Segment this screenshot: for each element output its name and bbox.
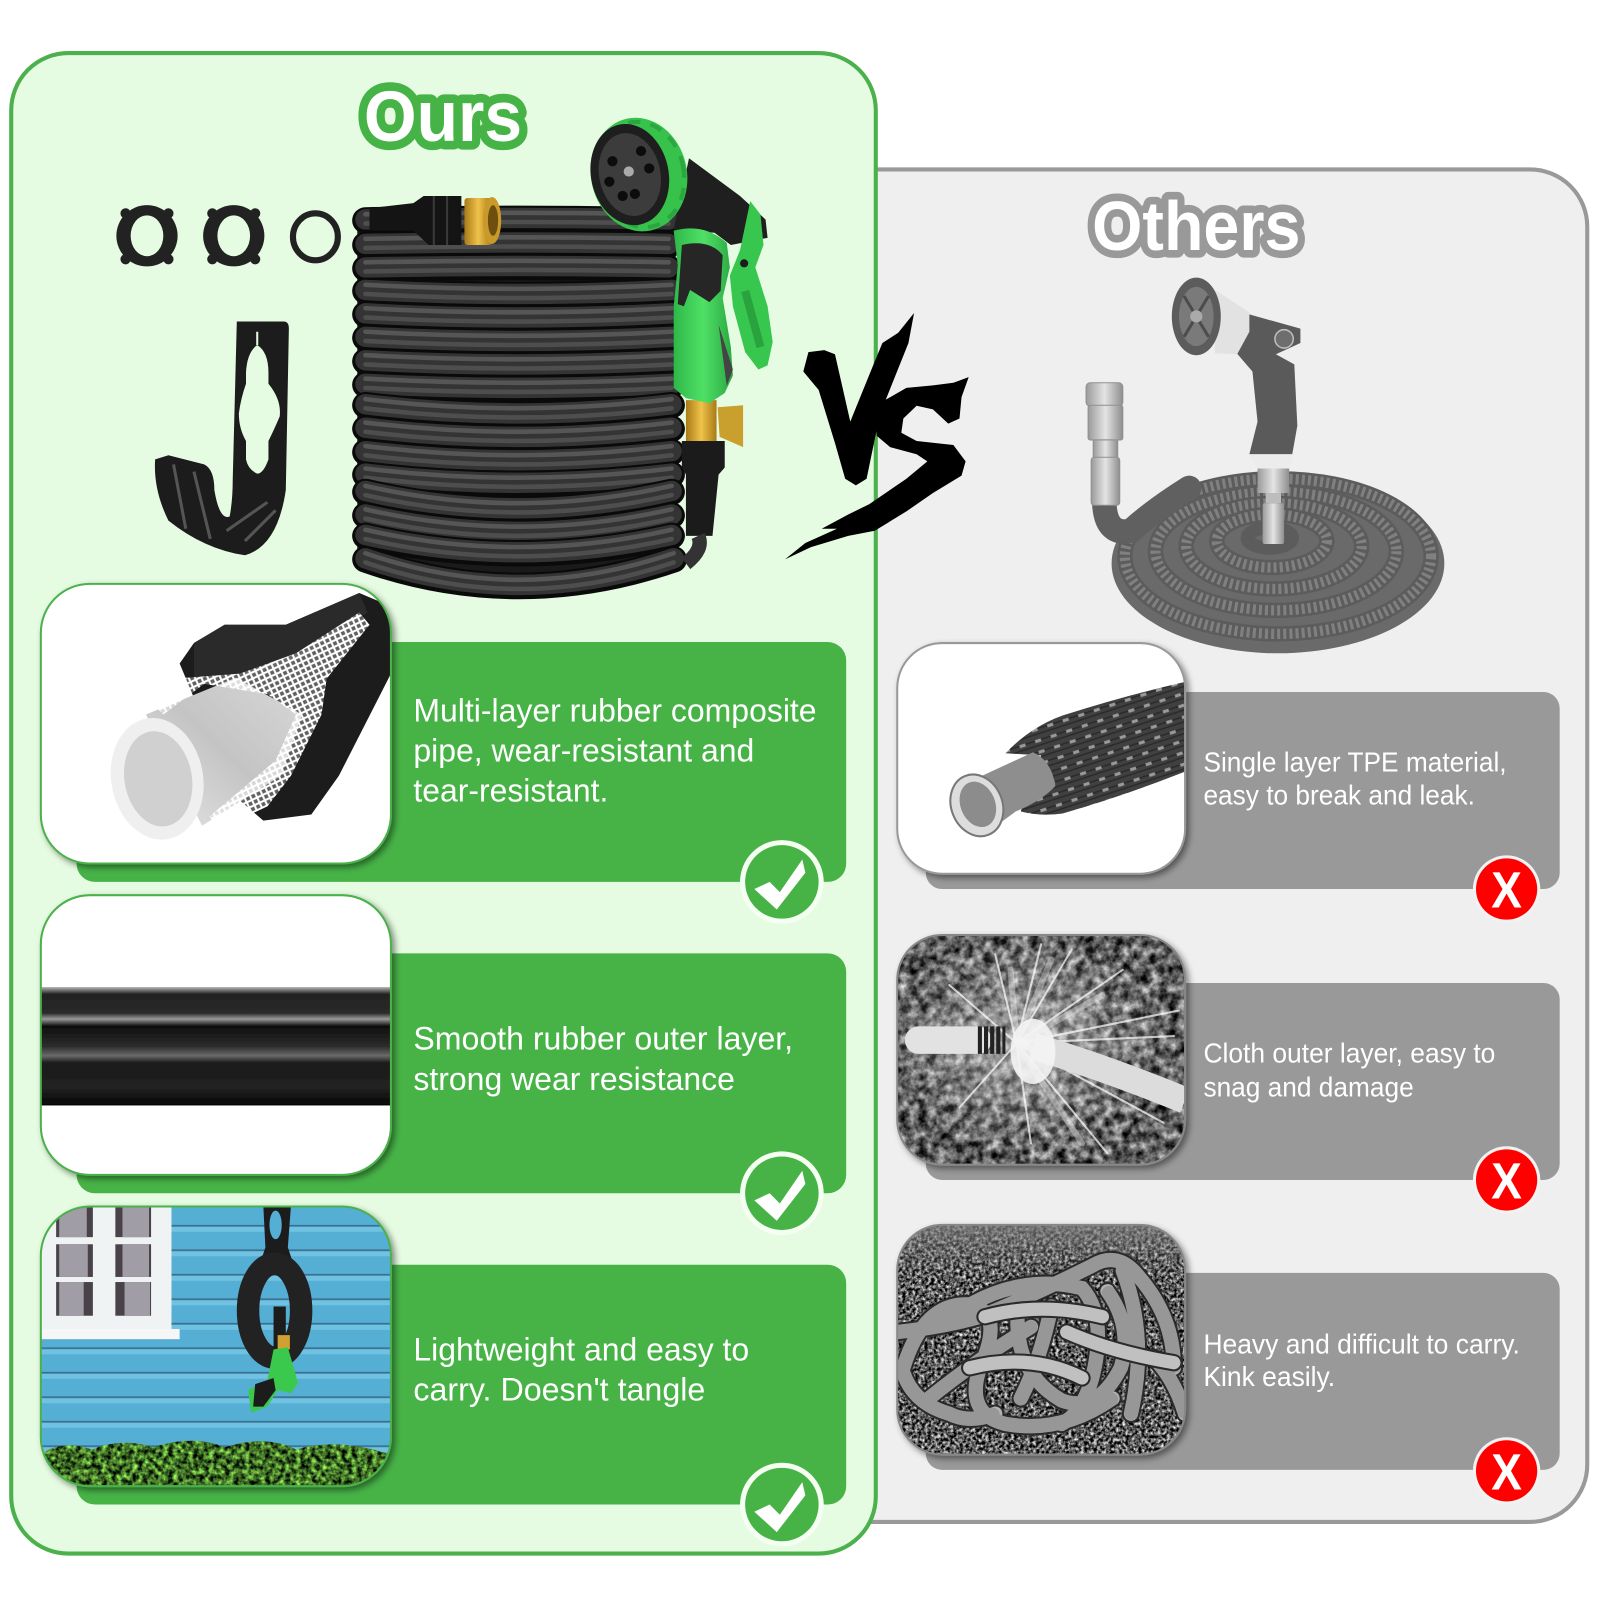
icon: cross bbox=[1473, 1437, 1540, 1505]
accessory: washers bbox=[116, 205, 338, 266]
coil bbox=[1104, 474, 1444, 653]
text bar: easy to break and leak. bbox=[1203, 779, 1475, 810]
heading: Ours: Ours bbox=[364, 77, 522, 157]
text bar: Multi-layer rubber composite bbox=[413, 693, 817, 729]
left fitting bbox=[1086, 383, 1123, 505]
icon: cross: X bbox=[1491, 1152, 1522, 1209]
icon: cross bbox=[1473, 1146, 1540, 1214]
emblem: VS brush lettering bbox=[785, 313, 969, 559]
text bar: Lightweight and easy to bbox=[413, 1332, 749, 1368]
photo: smooth rubber hose bbox=[41, 895, 391, 1175]
text bar: pipe, wear-resistant and bbox=[413, 732, 754, 768]
product: ours coiled hose bbox=[357, 196, 676, 589]
text bar: Kink easily. bbox=[1203, 1361, 1335, 1392]
connector: brass coupling bbox=[370, 196, 501, 245]
text bar bbox=[926, 1273, 1560, 1470]
accessory: wall hook bbox=[155, 322, 289, 555]
text bar bbox=[77, 953, 846, 1193]
photo: hose hanging on blue wall bbox=[41, 1207, 391, 1486]
nozzle bbox=[1172, 278, 1300, 544]
product: others hose and nozzle bbox=[1086, 278, 1444, 653]
text bar: Smooth rubber outer layer, bbox=[413, 1020, 793, 1056]
heading: Others: Others bbox=[1092, 187, 1300, 265]
text bar: tear-resistant. bbox=[413, 772, 608, 808]
text bar bbox=[77, 1265, 846, 1505]
card: cloth outer layer bbox=[897, 935, 1560, 1214]
text bar: carry. Doesn't tangle bbox=[413, 1371, 705, 1407]
text bar bbox=[926, 692, 1560, 889]
card: heavy and kinks bbox=[897, 1225, 1560, 1505]
text bar: Single layer TPE material, bbox=[1203, 747, 1507, 778]
lower hose connector bbox=[682, 400, 743, 563]
text bar: Cloth outer layer, easy to bbox=[1203, 1038, 1495, 1069]
text bar: snag and damage bbox=[1203, 1071, 1414, 1102]
hanging hose bbox=[248, 1207, 301, 1413]
card: multi-layer bbox=[41, 584, 846, 924]
photo: tangled hose on gravel bbox=[897, 1225, 1185, 1455]
window bbox=[41, 1207, 180, 1339]
icon: check bbox=[740, 840, 824, 924]
icon: cross: X bbox=[1491, 1443, 1522, 1500]
photo: burst hose spraying bbox=[897, 935, 1185, 1165]
card: single layer TPE bbox=[897, 643, 1560, 923]
text bar bbox=[77, 642, 846, 882]
card: smooth outer layer bbox=[41, 895, 846, 1235]
icon: cross: X bbox=[1491, 861, 1522, 918]
photo: braided hose section bbox=[897, 643, 1185, 874]
product: ours spray nozzle bbox=[580, 109, 773, 563]
panel: ours bbox=[11, 53, 876, 1554]
card: lightweight bbox=[41, 1207, 846, 1546]
icon: check bbox=[740, 1151, 824, 1235]
hedge bbox=[41, 1441, 391, 1486]
icon: cross bbox=[1473, 855, 1540, 923]
icon: check bbox=[740, 1463, 824, 1546]
photo: hose cross-section bbox=[41, 584, 391, 864]
panel: others bbox=[871, 167, 1590, 1524]
text bar bbox=[926, 983, 1560, 1180]
text bar: strong wear resistance bbox=[413, 1061, 735, 1097]
text bar: Heavy and difficult to carry. bbox=[1203, 1328, 1520, 1359]
